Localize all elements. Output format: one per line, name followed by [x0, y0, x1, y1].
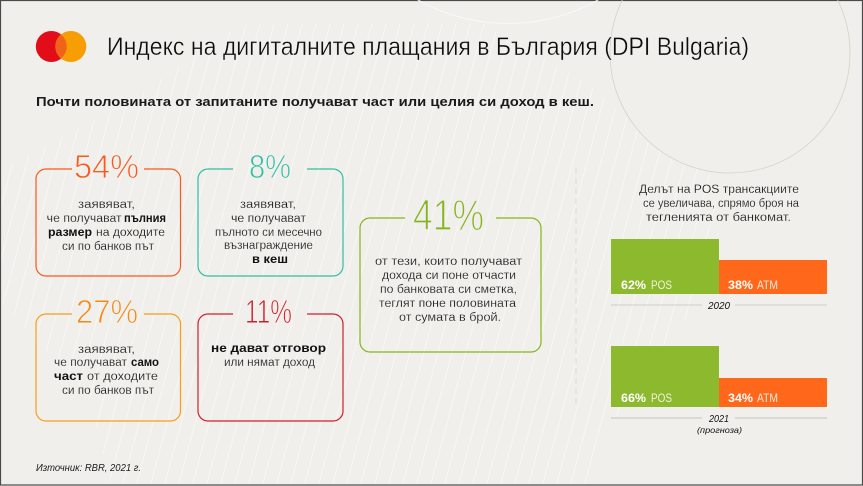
panel: 41%: по банковата си сметка, — [380, 284, 517, 296]
panel: 54%: че получават — [47, 213, 122, 225]
bar chart: 2021: 66% — [621, 391, 646, 405]
panel: 41%: дохода си поне отчасти — [382, 270, 516, 282]
panel: 41%: от сумата в брой. — [399, 312, 501, 324]
panel: 8%: в кеш — [252, 254, 288, 266]
panel: 8%: възнаграждение — [224, 240, 313, 252]
panel: 11%: или нямат доход — [224, 357, 315, 369]
bar chart: 2021 — [611, 346, 827, 435]
text: POS share heading — [639, 184, 800, 224]
bar chart: 2021: 34% — [728, 391, 753, 405]
bar chart: 2020: ATM — [757, 278, 778, 292]
subtitle: Почти половината от запитаните получават част или целия си доход в кеш. — [36, 94, 594, 109]
panel: 54% — [36, 148, 181, 276]
panel: 27%: си по банков път — [62, 385, 155, 397]
panel: 11%: 11% — [245, 293, 292, 330]
bar chart: 2021: (прогноза) — [697, 425, 742, 435]
source note: Източник: RBR, 2021 г. — [36, 462, 141, 474]
panel: 54%: размер — [48, 227, 92, 239]
bar chart: 2020: 38% — [728, 278, 753, 292]
panel: 11%: не дават отговор — [211, 343, 326, 355]
panel: 41%: 41% — [413, 191, 484, 240]
bar chart: 2020 — [611, 239, 827, 312]
panel: 27%: само — [131, 357, 159, 369]
bar chart: 2021: POS — [651, 391, 672, 405]
panel: 54%: 54% — [74, 148, 139, 185]
panel: 41% — [360, 191, 541, 352]
panel: 11% — [198, 293, 343, 421]
bar chart: 2020: 2020 — [707, 301, 730, 312]
bar chart: 2020: 62% — [621, 278, 646, 292]
text: POS share heading: тегленията от банкомат. — [646, 212, 791, 224]
panel: 8%: пълното си месечно — [215, 227, 322, 239]
panel: 54%: заявяват, — [78, 199, 135, 211]
panel: 54%: пълния — [124, 213, 166, 225]
text: POS share heading: Делът на POS трансакциите — [639, 184, 799, 196]
panel: 27%: 27% — [76, 293, 138, 330]
icon: Mastercard logo — [36, 31, 86, 62]
panel: 54%: си по банков път — [62, 241, 155, 253]
panel: 27%: от доходите — [87, 371, 158, 383]
panel: 27% — [36, 293, 181, 421]
text: POS share heading: се увеличава, спрямо броя на — [643, 198, 800, 210]
bar chart: 2020: POS — [651, 278, 672, 292]
panel: 27%: част — [54, 371, 83, 383]
panel: 8%: заявяват, — [240, 199, 296, 211]
panel: 27%: заявяват, — [78, 344, 135, 356]
panel: 41%: теглят поне половината — [379, 298, 517, 310]
panel: 8% — [198, 148, 343, 276]
panel: 8%: че получават — [231, 213, 307, 225]
title: Индекс на дигиталните плащания в България (DPI Bulgaria) — [107, 33, 749, 61]
panel: 41%: от тези, които получават — [375, 256, 523, 268]
panel: 8%: 8% — [249, 148, 291, 185]
panel: 27%: че получават — [54, 357, 128, 369]
panel: 54%: на доходите — [96, 227, 165, 239]
bar chart: 2021: 2021 — [708, 414, 729, 425]
bar chart: 2021: ATM — [757, 391, 778, 405]
